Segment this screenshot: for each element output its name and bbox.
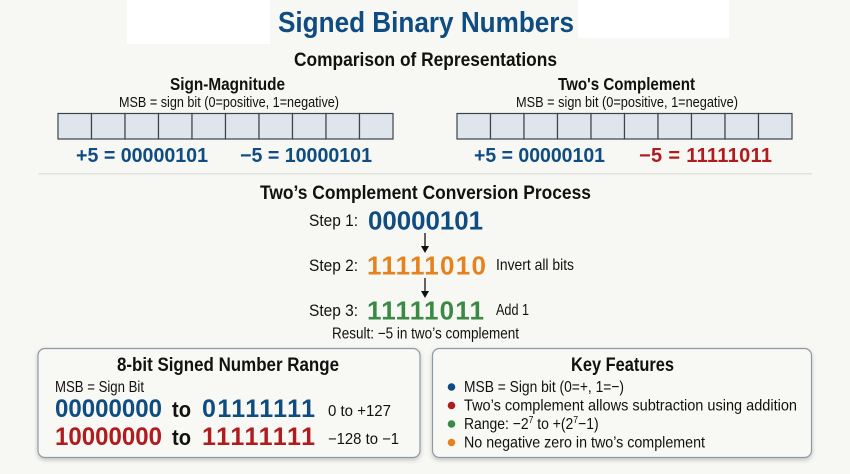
feature 1: MSB = Sign bit (0=+, 1=−) <box>464 379 624 396</box>
feature 4: No negative zero in two’s complement <box>464 434 705 452</box>
value: +5: +5 = 00000101 <box>76 145 208 167</box>
step 3 <box>309 296 529 326</box>
bit cells <box>457 114 792 139</box>
value: +5: +5 = 00000101 <box>474 145 605 167</box>
arrow: step 1 to 2 <box>421 233 429 253</box>
heading: sign-magnitude: Sign-Magnitude <box>170 74 285 94</box>
row: positive range: to <box>172 397 191 422</box>
heading: key features: Key Features <box>571 355 674 376</box>
step 1: Step 1: <box>309 211 358 230</box>
step 2 <box>309 250 574 280</box>
arrow: step 2 to 3 <box>421 278 429 298</box>
step 2: 11111010 <box>367 250 486 280</box>
feature 3: 7 <box>573 414 578 425</box>
row: positive range: 0 to +127 <box>328 403 391 420</box>
panel: 8-bit signed number range <box>38 348 420 458</box>
heading: range: 8-bit Signed Number Range <box>117 355 339 376</box>
result text: Result: −5 in two’s complement <box>332 326 520 342</box>
feature 3: −1) <box>578 415 599 433</box>
step 1 <box>309 206 483 236</box>
panel: key features <box>432 348 812 458</box>
step 3: Step 3: <box>309 301 358 320</box>
feature 3: 7 <box>529 414 533 425</box>
row: positive range: 01111111 <box>202 395 315 423</box>
row: negative range: to <box>172 425 191 450</box>
text: MSB sign bit: MSB = Sign Bit <box>55 379 145 396</box>
panel: two's complement <box>457 74 792 167</box>
heading: conversion process: Two’s Complement Conversion Process <box>260 182 591 204</box>
value: -5: −5 = 10000101 <box>240 145 372 167</box>
text: MSB note: MSB = sign bit (0=positive, 1=negative) <box>119 95 339 111</box>
row: negative range <box>55 423 399 451</box>
heading: two's complement: Two's Complement <box>558 74 695 94</box>
step 3: Add 1 <box>496 302 529 319</box>
feature 2: Two’s complement allows subtraction using addition <box>464 398 797 414</box>
text: MSB note: MSB = sign bit (0=positive, 1=negative) <box>516 95 738 111</box>
feature 3: Range: −2 <box>464 415 529 433</box>
row: negative range: 11111111 <box>202 423 315 451</box>
title: Signed Binary Numbers <box>278 7 574 39</box>
feature 3: to +(2 <box>533 415 573 433</box>
step 2: Invert all bits <box>496 257 574 274</box>
value: -5: −5 = 11111011 <box>639 145 772 167</box>
step 1: 00000101 <box>368 206 483 236</box>
row: negative range: −128 to −1 <box>328 431 399 448</box>
row: positive range <box>55 395 391 423</box>
step 2: Step 2: <box>309 256 358 275</box>
panel: sign-magnitude <box>58 74 393 167</box>
step 3: 11111011 <box>367 296 484 326</box>
row: negative range: 10000000 <box>55 423 162 451</box>
heading: comparison of representations: Comparison of Representations <box>294 49 557 71</box>
bit cells <box>58 114 393 139</box>
row: positive range: 00000000 <box>55 395 162 423</box>
feature 3 <box>448 414 599 433</box>
